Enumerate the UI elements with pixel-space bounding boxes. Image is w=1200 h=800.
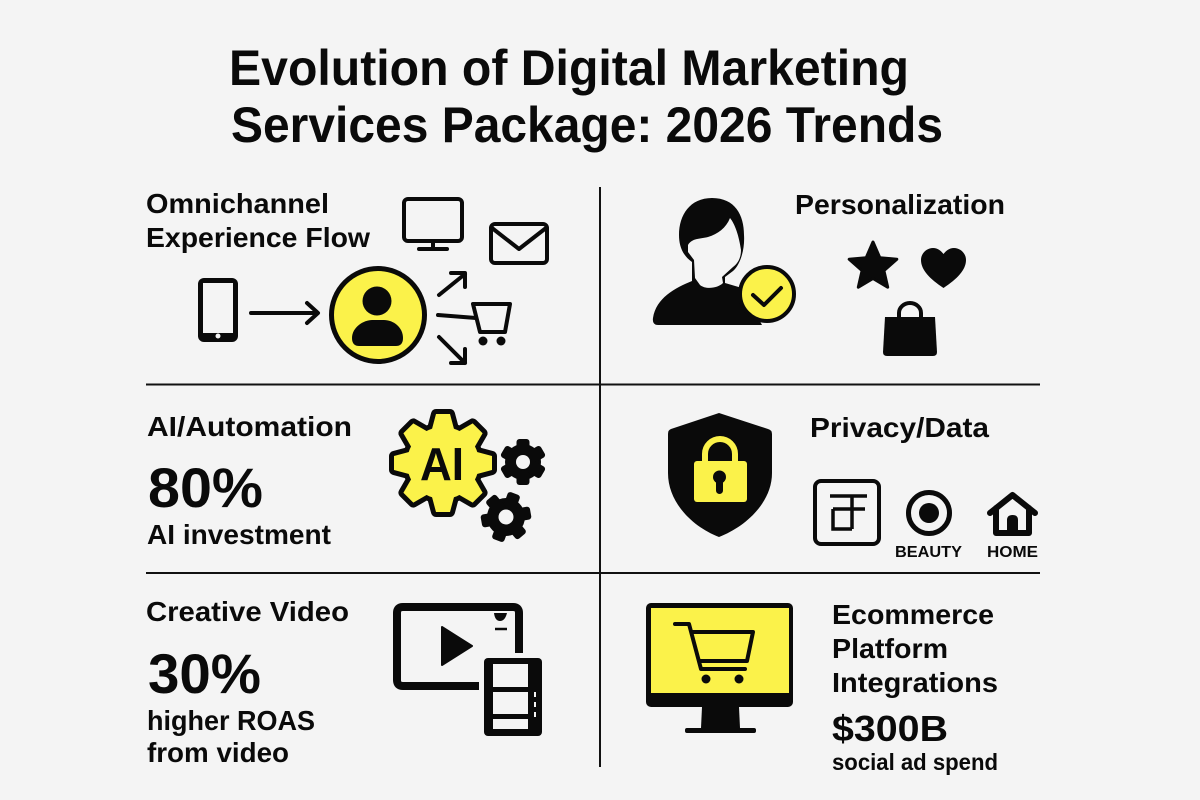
stat: 80%: 80% [148, 456, 263, 519]
label: HOME: HOME [987, 544, 1038, 561]
icon: monitor with cart [646, 603, 793, 733]
arrow: to email [439, 273, 465, 295]
heading: Ecommerce Platform Integrations: Ecommerce [832, 599, 994, 630]
caption: higher ROAS from video: higher ROAS [147, 705, 315, 736]
panel: ecommerce [646, 599, 998, 775]
label: BEAUTY: BEAUTY [895, 544, 962, 561]
icon: person with check badge [653, 198, 794, 325]
caption: higher ROAS from video: from video [147, 737, 289, 768]
title [229, 40, 943, 153]
panel: AI/automation [147, 411, 546, 550]
icon: desktop monitor [404, 199, 462, 249]
heading: Privacy/Data: Privacy/Data [810, 412, 989, 443]
caption: social ad spend: social ad spend [832, 749, 998, 775]
heading: Ecommerce Platform Integrations [832, 599, 998, 698]
heading: Creative Video: Creative Video [146, 596, 349, 627]
arrow: to cart [438, 315, 476, 318]
icon: shopping cart [473, 304, 510, 346]
icon: email envelope [491, 224, 547, 263]
icon: smartphone [198, 278, 238, 342]
icon: brand square glyph [815, 481, 879, 544]
icon: heart [921, 248, 966, 288]
heading: personalization: Personalization [795, 189, 1005, 220]
heading: omnichannel [146, 188, 370, 253]
stat: 30%: 30% [148, 642, 261, 705]
stat: $300B: $300B [832, 708, 948, 749]
caption: higher ROAS from video [147, 705, 315, 768]
title: Services Package: 2026 Trends [231, 97, 943, 153]
icon: small gear lower [480, 491, 532, 543]
panel: privacy/data [668, 412, 1038, 561]
heading: AI/Automation: AI/Automation [147, 411, 352, 442]
icon: star [849, 242, 897, 287]
arrow: phone to customer [251, 303, 318, 323]
icon: video screen and phone [397, 607, 542, 736]
icon: customer circle [332, 268, 424, 362]
arrow: downward channel [439, 337, 465, 363]
panel: creative video [146, 596, 542, 768]
icon: shopping bag [883, 303, 937, 356]
icon: AI gear: AI [420, 438, 464, 490]
panel: personalization [653, 189, 1005, 356]
title: Evolution of Digital Marketing [229, 40, 909, 96]
caption: AI investment: AI investment [147, 519, 331, 550]
heading: omnichannel: Omnichannel [146, 188, 329, 219]
heading: Ecommerce Platform Integrations: Platform [832, 633, 948, 664]
icon: home [990, 495, 1035, 533]
icon: AI gear [394, 414, 492, 512]
icon: shield with padlock [668, 413, 772, 537]
heading: Ecommerce Platform Integrations: Integrations [832, 667, 998, 698]
heading: omnichannel: Experience Flow [146, 222, 370, 253]
icon: small gear upper [500, 439, 546, 485]
panel: omnichannel [146, 188, 547, 363]
icon: beauty target [908, 492, 950, 534]
